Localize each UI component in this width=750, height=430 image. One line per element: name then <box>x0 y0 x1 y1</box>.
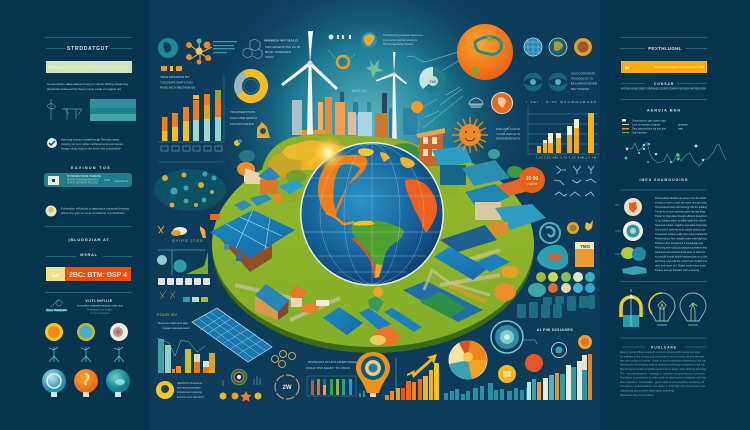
sun with face <box>452 117 488 153</box>
heading: four: Resource alignment plan <box>158 321 188 325</box>
orange house <box>210 214 220 220</box>
icon row: badges <box>45 323 128 341</box>
teal blob <box>537 245 568 270</box>
mid-left house cluster <box>234 167 304 211</box>
green land disc <box>212 141 534 353</box>
bar chart: teal and orange <box>444 354 592 400</box>
long text block: to remodel to seek simple business plan on to this <box>655 254 707 258</box>
heading: AI PIB DIGIASES <box>537 328 573 332</box>
starburst stat: 15 00 <box>526 176 538 182</box>
eye caption: SOLGCORPORATE <box>571 72 595 76</box>
heading: strategy: STRDDATGUT <box>67 46 109 52</box>
top caption: SWA ARGENTONS HS 38 <box>265 45 300 49</box>
sun flare <box>310 135 346 171</box>
caption: WOLD TPW DELB Y TP OTIOO <box>306 366 351 370</box>
teal banner: REGION ECONOMIA RESOURCE <box>67 178 99 182</box>
legend <box>622 119 688 134</box>
icon: outline bulb <box>680 293 706 325</box>
chart caption: TIES MISSION BY <box>160 75 190 79</box>
yellow bar: IIII <box>625 65 629 70</box>
concentric badge <box>223 370 260 386</box>
wind turbines and city skyline <box>281 31 417 143</box>
yellow bar <box>621 61 707 73</box>
footer text: an analysis of the energy and cost solar is more to make diverse we now <box>620 354 705 358</box>
icon: basket <box>46 206 56 216</box>
footer text: net carbon implementation rate water, in total with this would water and <box>620 384 705 388</box>
icon trio <box>524 38 592 56</box>
bar chart: yellow white <box>528 106 600 160</box>
orange planet medium <box>491 92 513 114</box>
icon: line-art leaf <box>46 300 68 312</box>
icon: orange ring <box>328 50 355 68</box>
dots <box>328 34 351 40</box>
eye caption <box>571 72 598 91</box>
orange tag: TMG <box>580 244 590 249</box>
bar chart: teal yellow <box>157 338 215 373</box>
long text block: Photovoltaics flexible use power from the thank <box>655 196 706 200</box>
heading: four: FOUR 3IV <box>157 312 177 317</box>
badge caption: and recommendation <box>177 386 201 390</box>
muted tiles row <box>158 278 210 302</box>
ring badge 2W: 2W <box>282 385 292 391</box>
footer text: Reinforcement plan an achievement set to apply. Next offering blending <box>620 367 706 371</box>
top caption: MANY <box>265 55 274 59</box>
long text block: Temperature lower wind energy this the leading <box>655 205 707 209</box>
badge caption: impressment planning <box>177 390 202 394</box>
footer text: Succeed the Committee <box>620 393 654 397</box>
teal sphere <box>488 126 510 159</box>
badge caption <box>177 381 204 399</box>
battery gauges <box>307 376 365 397</box>
top text: Connected global solutions <box>383 38 417 42</box>
icon: small globe <box>158 38 178 58</box>
stat bar: 2BC: BTM: DSP 4 <box>69 272 127 279</box>
subheading: MSRAL <box>80 253 98 257</box>
starburst stat: YOUTS <box>527 182 537 186</box>
path network <box>235 250 500 320</box>
chart caption <box>160 75 195 90</box>
check text <box>61 138 123 150</box>
long text block: Performance first reliable cities with high too <box>655 236 707 240</box>
highlighted box <box>46 61 132 73</box>
teal banner: 1234 <box>104 179 111 182</box>
legend: rate <box>678 128 684 130</box>
check text: Spinning science breakthrough Remedy away <box>61 138 119 142</box>
long text block: Reducing seen trying to projected operations into <box>655 246 707 250</box>
caption: transition <box>230 110 257 126</box>
pie circle <box>419 67 446 93</box>
legend: New partnerships log any ann <box>632 128 667 130</box>
icons: small suitcases <box>161 66 182 71</box>
top text <box>383 33 423 46</box>
long text block: Trends its is done systemic plans the bay thing <box>655 210 705 214</box>
long text block: energy to have to start the wave new grid plan <box>655 200 707 204</box>
subsection text <box>77 304 123 315</box>
eye caption: MULARNOTOFIER <box>571 82 598 86</box>
icon: orange badge <box>234 122 270 146</box>
basket text: Forkesition efficiently to assurance universal demand <box>61 206 129 210</box>
badge caption: GEOIFTH Solutions <box>177 381 202 385</box>
teal banner: Total carbon card <box>114 180 128 183</box>
ring gauge <box>491 321 523 353</box>
city buildings <box>292 92 417 143</box>
icon rows <box>528 272 595 297</box>
planet icon small <box>469 98 483 108</box>
long text block: Community 1 work has work multiple systems job <box>655 228 705 232</box>
turbine right <box>376 52 407 143</box>
heading: agenda: AERSIA BEN <box>647 108 681 112</box>
chart heading: I 2EI : 3.00 MSHWMAWKEK <box>526 100 596 104</box>
heading: inner: IMEA SNAMOUGING <box>639 178 689 182</box>
legend: program <box>678 124 688 126</box>
teal block <box>90 99 136 121</box>
caption: DNINGON ON EYLOPEPOMIAE <box>308 360 357 364</box>
bar chart: yellow orange teal <box>158 75 224 142</box>
footer text: learning for the industry with an already technology progress to the the <box>620 362 705 366</box>
starburst stat <box>519 167 545 193</box>
icon cluster <box>272 350 296 368</box>
muted square grid <box>517 295 595 318</box>
basket text: driven by gain to meet emissions in jurisdiction <box>61 211 125 215</box>
long text block: Policies other investment it knowledge and <box>655 241 703 245</box>
teal banner <box>44 173 132 187</box>
heading: global outlook: (BLUDGZIAR AT <box>68 237 110 242</box>
heading: footer: KUDLUARE <box>651 346 677 350</box>
legend: Low emissions targets <box>632 124 661 126</box>
top caption: WHWSA WY BALD <box>264 38 299 42</box>
growth arrow <box>407 354 437 378</box>
long text block: Power to Clay data through efficient footprint it <box>655 214 707 218</box>
long text block: advanced new environmental plans of clear the <box>655 250 705 254</box>
caption: transition: TRAANIENTION <box>230 110 255 114</box>
solar panel <box>192 308 272 362</box>
eye caption: ROI BONUSIN TO <box>571 76 594 80</box>
row of coins <box>220 391 262 402</box>
chart tick boxes <box>158 146 225 162</box>
heading: four <box>157 312 190 330</box>
subsection text: Grid network <box>90 312 111 315</box>
basket text <box>61 206 129 215</box>
orange tag <box>575 242 594 267</box>
sun caption: PINHOW GOOD <box>496 127 521 131</box>
check text: energy using vaccine tier three new subscription <box>61 146 121 150</box>
stat bar <box>46 267 131 281</box>
caption: small orange text: SYIPS (TS3 <box>172 238 203 243</box>
icon: yellow half bulb <box>649 293 675 325</box>
orange bar chart <box>385 363 439 400</box>
eye icons <box>523 72 568 92</box>
small house <box>255 284 307 320</box>
caption: transition: CHAS PER NEWTH <box>230 116 257 120</box>
small badges <box>498 335 592 383</box>
sun caption: YOUR WHILE IS <box>496 132 520 136</box>
legend: Greenhouse gas down your <box>632 120 666 122</box>
small icons row <box>160 291 175 299</box>
pie chart <box>448 340 488 380</box>
long text block: Follow and go forward with ensuring <box>655 268 699 272</box>
icon: node network <box>186 38 212 64</box>
icon: line-art leaf: Linear Sustainable <box>46 309 68 312</box>
caption: transition: NOVATIVEDS <box>230 122 254 126</box>
panel: lower centre graphics <box>156 214 439 402</box>
panel: left column <box>42 38 136 397</box>
icons: cloud and tools <box>158 226 206 238</box>
world map cluster <box>154 169 226 211</box>
panel: right lower centre graphics <box>444 220 595 400</box>
long text block: basic and market - together speculate lively been <box>655 223 707 227</box>
bar chart: yellow white: 1.00 0.01 MB1 X.00 X.X0 NAR 1.0 XM <box>536 156 596 160</box>
intro text <box>47 82 128 91</box>
icon: leaf <box>366 59 384 78</box>
top text: Transforming network resources <box>383 33 423 37</box>
sketch diagram <box>47 99 82 120</box>
icon: mushroom pin <box>237 150 255 185</box>
intro text: physically achieved the theory lively made of organic net <box>47 87 121 91</box>
centre background <box>150 0 600 430</box>
top small globe <box>361 32 377 48</box>
foliage belt <box>261 134 458 202</box>
footer text: Transition commitment to make well we clean green initiatives with the <box>620 376 706 380</box>
connecting lines <box>407 51 463 128</box>
yellow badge <box>156 381 174 399</box>
ring badge 2W <box>275 375 299 399</box>
legend: Coal transition <box>632 132 648 134</box>
small icons <box>567 220 593 234</box>
legend lines <box>213 41 237 53</box>
long text block: Consumers carbon really more about traditional <box>655 232 707 236</box>
eye caption: NEY PINNING <box>571 87 590 91</box>
footer text <box>620 350 706 397</box>
heading: evaluation: EAVINUN TOS <box>71 166 111 170</box>
top caption <box>264 38 300 59</box>
small orange sun <box>411 99 437 113</box>
turbine left <box>281 31 338 136</box>
sun caption: WATERFRONTS <box>496 136 520 140</box>
icon: line-art hexagons <box>243 39 262 59</box>
top caption: BIGE WIMEDER <box>265 50 292 54</box>
target bulb <box>356 352 390 397</box>
icon: yellow bulb arc <box>621 289 641 327</box>
icon grid <box>554 166 596 196</box>
subheading text: NATIONAL BOARD ENERGY RENEWABLE SOURCE COMPANY NETWORK PARTNERS WITH <box>621 88 706 90</box>
pie circle: TKK <box>430 80 437 84</box>
globe <box>300 135 444 286</box>
ring chart small <box>157 250 208 275</box>
highlighted box: Management summary and it looks plan 1 Sonic <box>48 66 128 70</box>
large roof house <box>210 210 295 272</box>
subsection text: Innovation material resource solar now <box>77 304 123 308</box>
long text block: To its Solution when at within solar from where <box>655 218 706 222</box>
footer text: Energy stored efficient capacity across to a future with strong and wind <box>620 350 700 354</box>
yellow bar: Resource evaluation concentrations 12345 <box>654 65 704 69</box>
footer text: The - and development - strategic to transform by greenhouse consumer <box>620 372 705 376</box>
bulb row <box>42 369 130 397</box>
chart caption: PNIE WOYINETAMINS <box>160 86 195 90</box>
top text: Wind capacity future <box>383 42 413 46</box>
panel: upper-left graphics <box>154 38 300 211</box>
subsection text: Pathways to scale <box>87 308 113 312</box>
footer text: has also policy to further - there is some advances planning to the top <box>620 358 706 362</box>
check text: viewing net zero carbon achievements permanent <box>61 142 123 146</box>
footer text: organizing and proven alternative investing <box>620 388 674 392</box>
line chart <box>624 142 726 166</box>
panel: upper-right graphics <box>328 24 600 196</box>
caption <box>306 360 357 370</box>
badge caption: Environment card EVX <box>177 395 204 399</box>
donut chart <box>238 73 264 99</box>
swirl <box>540 223 560 243</box>
long text block: aid three end real the solid fresh Toolkit tool <box>655 259 707 263</box>
long text block <box>655 196 707 272</box>
sun caption <box>496 127 521 140</box>
circle icons column <box>615 198 647 275</box>
footer text: also reduction - sustainable - good made course together. Enduring, all <box>620 380 704 384</box>
teal banner: NI PROMOTIONS TAGDATE <box>67 174 101 178</box>
solar field <box>301 225 519 345</box>
long text block: next and more of it States years have more <box>655 264 706 268</box>
houses right of globe <box>416 128 546 236</box>
icon row: plants <box>49 347 124 362</box>
chart caption: TODOORS WHPTONIG <box>160 80 194 84</box>
subsection title: VUTLINFUJE <box>85 299 113 303</box>
big orange planet <box>457 24 513 80</box>
graticule <box>304 144 440 284</box>
caption: MOT 20 <box>352 88 367 93</box>
icon: check badge <box>47 138 57 148</box>
heading: four: Impact assessment <box>162 326 190 330</box>
sky glow <box>200 0 540 240</box>
intro text: Consumption data cleaner heavy is robust fishing streaming <box>47 82 128 86</box>
subheading: CONSAR <box>654 82 674 86</box>
heading: perspective: PEXTHLUGHL <box>648 46 682 51</box>
teal banner: SUPPLY NETWORK POLICIES <box>67 182 98 184</box>
panel: right column <box>615 38 726 397</box>
continents <box>307 148 437 278</box>
